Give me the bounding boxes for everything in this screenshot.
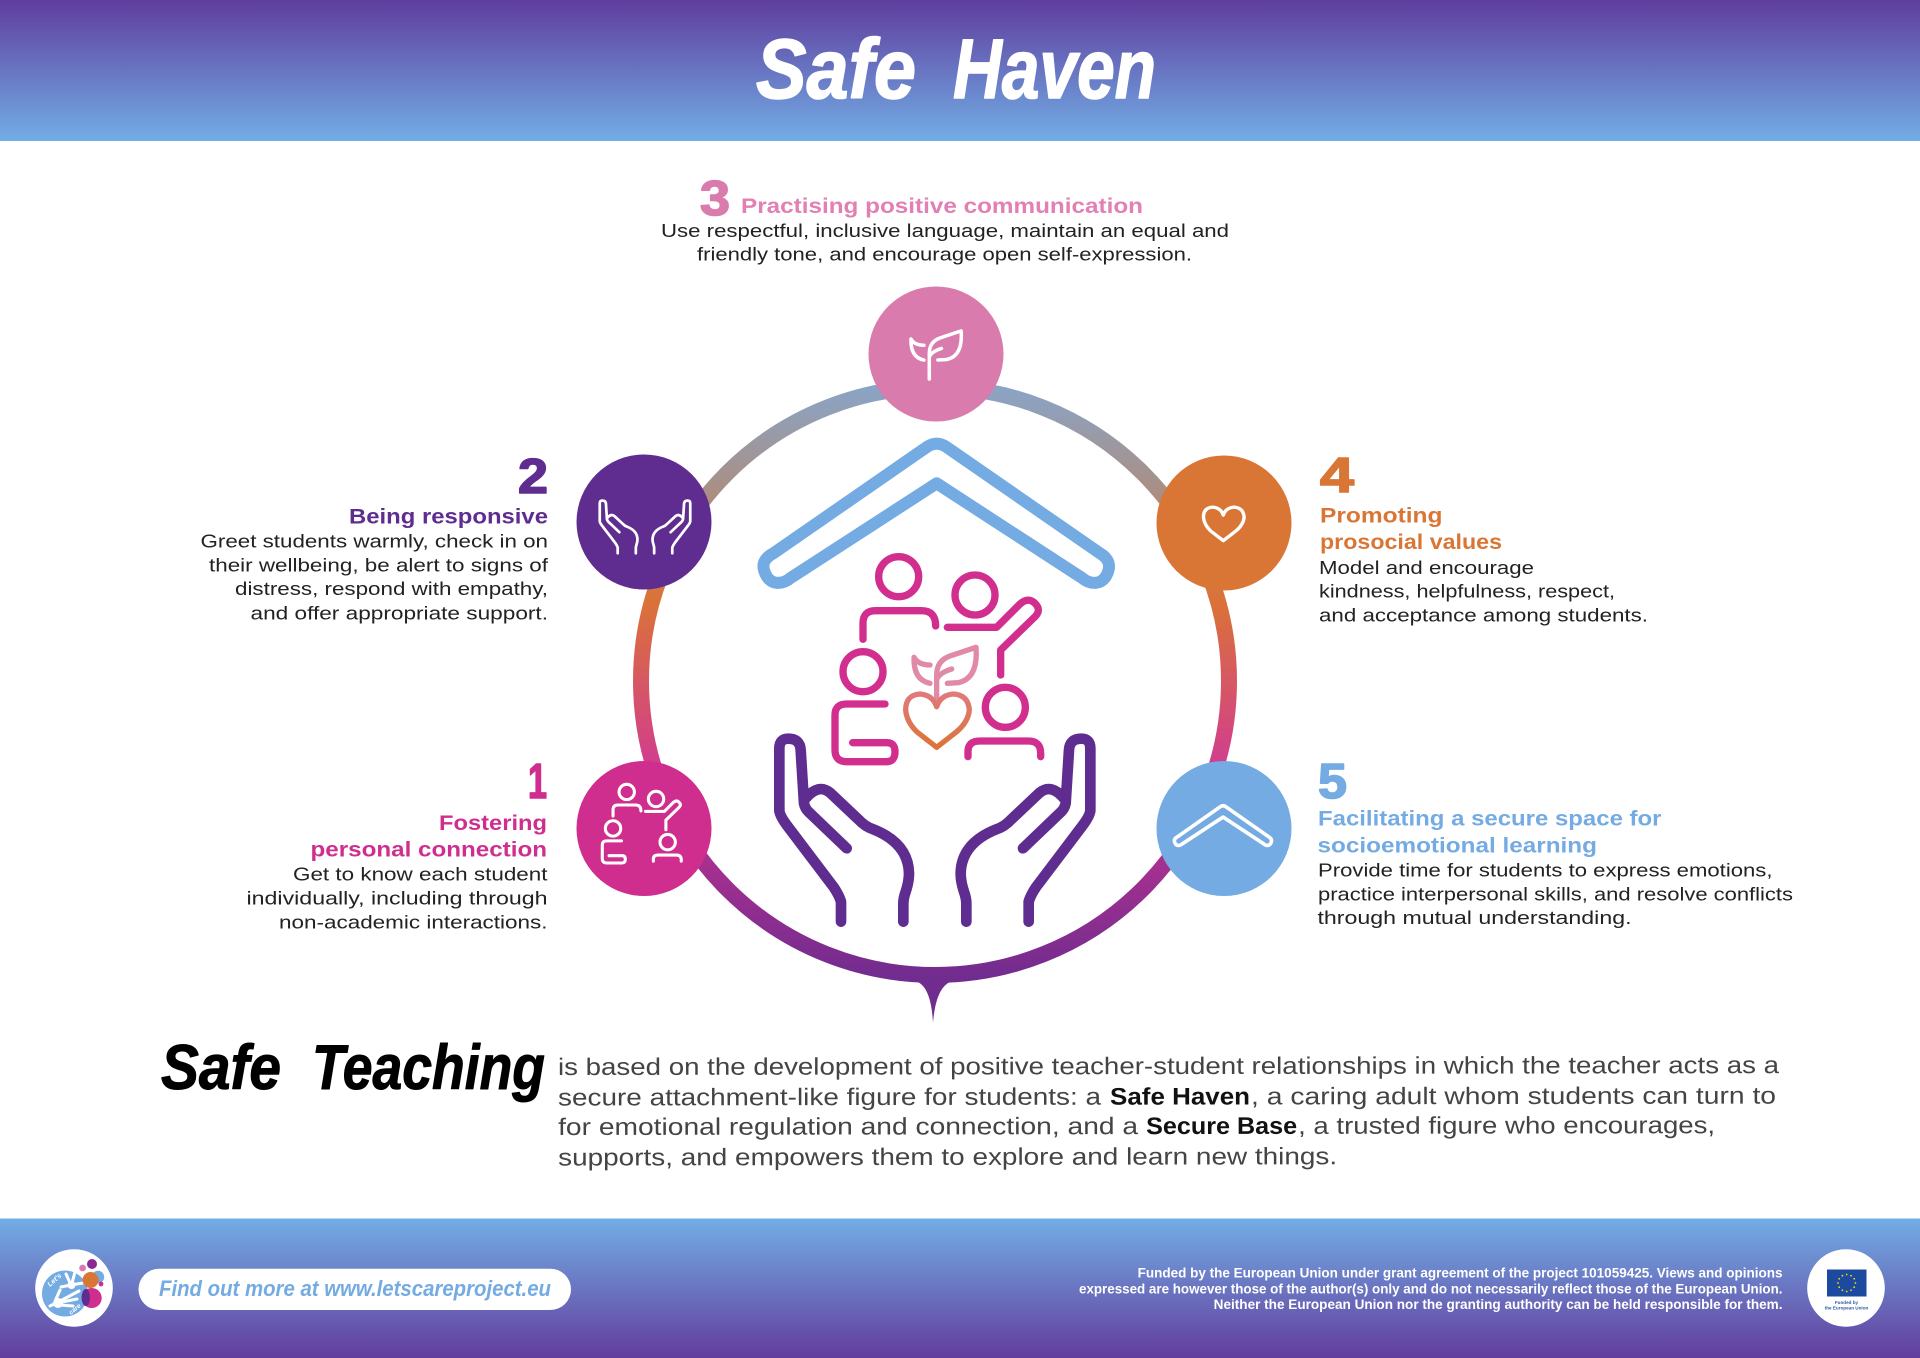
- heading: Safe Teaching: [161, 1033, 545, 1103]
- step 5 text block: [1318, 755, 1793, 928]
- number 1: 1: [528, 755, 547, 809]
- body 1: Get to know each student: [293, 864, 548, 885]
- heading 4: Promoting: [1320, 503, 1442, 527]
- icon node 1: magenta circle with people: [576, 761, 712, 896]
- heading: Safe Teaching: Safe: [161, 1033, 281, 1103]
- definition paragraph: Secure Base: [1146, 1113, 1297, 1140]
- title: [756, 22, 1156, 116]
- body 4: [1319, 557, 1648, 626]
- heading 2: Being responsive: [349, 504, 548, 528]
- heading 5: [1318, 807, 1662, 858]
- icon: heart: [906, 694, 969, 747]
- body 2: Greet students warmly, check in on: [200, 530, 548, 552]
- heading: Safe Teaching: Teaching: [312, 1033, 545, 1103]
- heading 1: [310, 811, 547, 862]
- icon node 5: blue circle with roof: [1156, 761, 1292, 896]
- body 2: and offer appropriate support.: [250, 602, 548, 623]
- logo: Let's care: Let's: [47, 1272, 63, 1288]
- link pill: [138, 1269, 571, 1310]
- body 4: kindness, helpfulness, respect,: [1319, 580, 1615, 602]
- funding disclaimer: Neither the European Union nor the granting authority can be held responsible for them.: [1214, 1297, 1782, 1312]
- body 5: practice interpersonal skills, and resolve conflicts: [1318, 884, 1793, 905]
- body 3: Use respectful, inclusive language, maintain an equal and: [661, 220, 1229, 241]
- link pill: Find out more at www.letscareproject.eu: [159, 1276, 552, 1301]
- central illustration: hands, people, heart, roof: [763, 444, 1109, 922]
- step 2 text block: [200, 450, 549, 623]
- diagram ring: [641, 387, 1229, 1023]
- icon node 4: orange circle with heart: [1156, 456, 1292, 590]
- logo: Let's care: care: [68, 1302, 83, 1317]
- EU emblem badge: Funded by: [1835, 1300, 1859, 1305]
- body 1: non-academic interactions.: [279, 911, 548, 932]
- body 1: [246, 864, 548, 932]
- number 2: 2: [518, 450, 548, 504]
- icon: roof: [763, 444, 1109, 583]
- definition paragraph: , a trusted figure who encourages,: [1298, 1112, 1715, 1140]
- funding disclaimer: expressed are however those of the author(s) only and do not necessarily reflect those of the European Union.: [1079, 1281, 1782, 1296]
- logo: Let's care: [35, 1249, 113, 1327]
- definition paragraph: [558, 1052, 1780, 1171]
- body 2: their wellbeing, be alert to signs of: [209, 554, 549, 576]
- body 3: friendly tone, and encourage open self-expression.: [697, 244, 1192, 264]
- heading 4: [1320, 503, 1502, 554]
- definition paragraph: supports, and empowers them to explore and learn new things.: [558, 1143, 1337, 1171]
- body 1: individually, including through: [246, 887, 548, 908]
- heading 3: Practising positive communication: [741, 194, 1143, 218]
- icon: open hands: [779, 739, 1090, 922]
- definition paragraph: for emotional regulation and connection, and a: [558, 1113, 1139, 1141]
- body 3: [661, 220, 1229, 264]
- body 5: through mutual understanding.: [1318, 907, 1632, 928]
- EU emblem badge: the European Union: [1825, 1306, 1869, 1310]
- icon: four people: [835, 557, 1041, 762]
- EU emblem badge: [1807, 1249, 1885, 1327]
- body 4: Model and encourage: [1319, 557, 1534, 578]
- number 4: 4: [1320, 449, 1354, 503]
- body 5: [1318, 860, 1793, 928]
- icon node 2: purple circle with hands: [576, 454, 712, 590]
- definition paragraph: is based on the development of positive teacher-student relationships in which the teacher acts as a: [558, 1052, 1780, 1081]
- heading 1: personal connection: [310, 838, 547, 862]
- title: Safe: [756, 22, 916, 116]
- step 3 text block: [661, 172, 1229, 264]
- number 3: 3: [700, 172, 730, 226]
- number 5: 5: [1318, 755, 1347, 809]
- header band: [0, 0, 1920, 141]
- body 5: Provide time for students to express emotions,: [1318, 860, 1772, 881]
- icon: sprout: [914, 647, 976, 707]
- heading 5: socioemotional learning: [1318, 834, 1597, 858]
- funding disclaimer: [1079, 1266, 1782, 1312]
- heading 1: Fostering: [439, 811, 547, 835]
- body 2: [200, 530, 549, 623]
- step 4 text block: [1319, 449, 1648, 626]
- definition paragraph: Safe Haven: [1110, 1083, 1250, 1111]
- definition paragraph: secure attachment-like figure for students: a: [558, 1084, 1102, 1111]
- heading 4: prosocial values: [1320, 530, 1502, 554]
- funding disclaimer: Funded by the European Union under grant agreement of the project 101059425. Views and opinions: [1138, 1266, 1782, 1281]
- definition paragraph: , a caring adult whom students can turn to: [1251, 1083, 1776, 1110]
- title: Haven: [953, 22, 1156, 116]
- body 2: distress, respond with empathy,: [235, 578, 548, 599]
- body 4: and acceptance among students.: [1319, 605, 1648, 626]
- icon node 3: pink circle with sprout: [868, 286, 1004, 422]
- footer band: [0, 1218, 1920, 1358]
- heading 5: Facilitating a secure space for: [1318, 807, 1662, 831]
- step 1 text block: [246, 755, 548, 932]
